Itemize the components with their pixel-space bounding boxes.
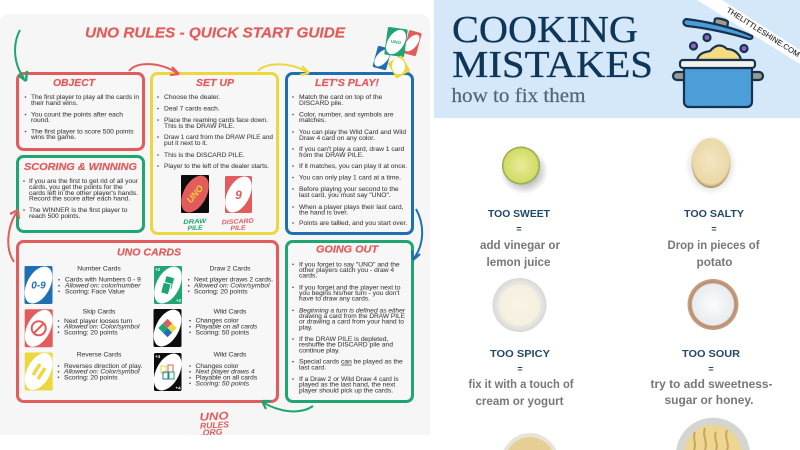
arrow: object to set up — [129, 64, 179, 75]
heading: scoring and winning: SCORING & WINNING — [24, 162, 137, 173]
panel: let's play — [286, 74, 412, 234]
text: wild cards: Playable on all cards — [196, 324, 258, 331]
text: too sour — [650, 348, 773, 407]
text: too sweet: add vinegar or — [480, 240, 561, 252]
text: reverse cards: Reverse Cards — [77, 352, 122, 359]
heading: uno cards: UNO CARDS — [117, 248, 181, 258]
icon: wild draw 4 card: +4 — [155, 354, 161, 359]
text: going out rules: Special cards can be played as the — [299, 359, 403, 366]
icon: discard pile card: 9 — [235, 188, 242, 202]
text: wild cards: Changes color — [196, 318, 239, 325]
text: going out rules: continue play. — [299, 348, 340, 355]
text: going out rules: other players catch you - draw 4 — [299, 267, 394, 274]
icon: bowl of cream — [492, 278, 546, 332]
text: going out rules: reshuffle the DISCARD pile and — [299, 342, 393, 349]
text: going out rules: last card. — [299, 364, 326, 371]
text: play steps: When a player plays their last card, — [299, 204, 404, 211]
text: wild draw 4 cards: Next player draws 4 — [196, 369, 255, 376]
panel: object — [18, 74, 144, 150]
text: scoring rules: The WINNER is the first player to — [29, 207, 128, 214]
panel: cooking header — [434, 0, 800, 118]
arrow: uno cards to scoring — [8, 210, 19, 262]
subtitle: how to fix them: how to fix them — [452, 86, 586, 107]
icon: potato — [685, 135, 737, 195]
title: UNO rules quick start guide: UNO RULES - QUICK START GUIDE — [85, 26, 346, 42]
text: set up steps: Player to the left of the dealer starts. — [164, 163, 269, 170]
arrow: green start arrow — [15, 30, 27, 81]
text: reverse cards: Reverses direction of play. — [64, 363, 142, 370]
label: draw pile — [183, 218, 208, 233]
text: skip cards: Skip Cards — [83, 308, 116, 315]
text: reverse cards — [58, 352, 142, 381]
text: wild cards: Scoring: 50 points — [196, 329, 250, 336]
icon: bottom right bowl of pasta — [676, 418, 750, 450]
icon: wild card — [148, 305, 187, 351]
text: play steps: You can only play 1 card at a time. — [299, 174, 401, 182]
text: too sweet — [480, 208, 561, 269]
text: too spicy — [468, 348, 574, 408]
ribbon: the little shine watermark: THELITTLESHINE.COM — [725, 6, 800, 59]
panel: UNO rules background — [0, 14, 430, 435]
label: discard pile: DISCARD — [222, 218, 254, 226]
text: set up steps: Deal 7 cards each. — [164, 106, 220, 112]
text: draw 2 cards — [188, 265, 273, 295]
text: too spicy: cream or yogurt — [476, 396, 564, 408]
text: reverse cards: Allowed on: Color/symbol — [63, 369, 140, 376]
text: object rules: their hand wins. — [31, 100, 78, 107]
text: too spicy: = — [517, 364, 523, 374]
text: too salty: TOO SALTY — [684, 208, 744, 220]
text: wild draw 4 cards: Changes color — [196, 363, 239, 370]
title: cooking mistakes — [452, 9, 653, 86]
text: going out rules: If the DRAW PILE is depleted, — [299, 336, 388, 343]
text: too sour: = — [708, 364, 714, 374]
text: draw 2 cards: Draw 2 Cards — [210, 265, 251, 272]
text: object rules: round. — [31, 117, 50, 124]
label: draw pile: PILE — [187, 225, 203, 232]
text: too salty: potato — [696, 257, 732, 269]
text: play steps: from the DRAW PILE. — [299, 152, 364, 159]
icon: wild draw 4 card: +4 — [176, 386, 181, 390]
text: scoring rules: If you are the first to get rid of all your — [29, 178, 139, 185]
text: wild draw 4 cards: Scoring: 50 points — [196, 380, 250, 387]
text: scoring rules: Record the score after each hand. — [29, 196, 130, 202]
panel: going out — [286, 242, 412, 402]
text: play steps: If it matches, you can play it at once. — [299, 163, 407, 170]
text: set up steps: Choose the dealer. — [164, 94, 220, 101]
text: going out rules: played as the last hand, the next — [299, 382, 395, 389]
text: going out rules: play. — [299, 325, 313, 332]
title: cooking mistakes: COOKING — [452, 9, 638, 51]
text: wild cards — [189, 308, 258, 336]
text: too sour: try to add sweetness- — [650, 379, 773, 391]
arrow: set up to let's play — [258, 64, 309, 75]
text: set up steps: This is the DISCARD PILE. — [164, 152, 245, 159]
text: play steps — [292, 94, 407, 227]
text: set up steps — [157, 94, 273, 170]
text: object rules: wins the game. — [30, 134, 76, 141]
text: too salty: Drop in pieces of — [668, 240, 760, 252]
logo: uno rules org: RULES — [200, 419, 230, 431]
text: going out rules: If a Draw 2 or Wild Draw 4 card is — [299, 376, 399, 383]
icon: discard pile card — [220, 172, 257, 217]
text: draw 2 cards: Allowed on: Color/symbol — [193, 283, 270, 290]
text: skip cards: Next player looses turn — [64, 318, 133, 325]
text: too sour: TOO SOUR — [682, 348, 740, 360]
icon: draw 2 card: +2 — [176, 298, 182, 303]
text: wild draw 4 cards: Playable on all cards — [196, 375, 258, 382]
icon: fan of UNO cards: UNO — [391, 39, 402, 45]
text: wild cards: Wild Cards — [214, 308, 247, 315]
text: going out rules: have to draw any cards. — [299, 296, 370, 303]
text: going out rules — [292, 261, 406, 394]
text: too sour: sugar or honey. — [664, 395, 754, 407]
text: going out rules: Beginning a turn is defined as either — [299, 307, 406, 314]
text: play steps: Match the card on top of the — [299, 94, 383, 101]
text: play steps: Color, number, and symbols are — [299, 112, 394, 118]
text: too sweet: lemon juice — [486, 257, 550, 269]
ribbon: the little shine watermark — [697, 0, 800, 64]
text: going out rules: or drawing a card from your hand to — [299, 319, 404, 326]
text: going out rules: If you forget and the player next to — [299, 284, 401, 291]
text: play steps: matches. — [299, 117, 326, 124]
text: number cards: Cards with Numbers 0 - 9 — [65, 277, 141, 284]
text: play steps: Points are tallied, and you start over. — [299, 220, 407, 227]
text: scoring rules: cards, you get the points for the — [29, 184, 123, 191]
arrow: going out to uno cards — [262, 401, 313, 411]
text: too sweet: = — [516, 224, 522, 234]
text: too sweet: TOO SWEET — [488, 208, 551, 220]
icon: reverse card — [19, 348, 58, 395]
label: discard pile — [222, 218, 255, 233]
title: cooking mistakes: MISTAKES — [452, 44, 653, 86]
text: play steps: DISCARD pile. — [299, 100, 343, 107]
text: going out rules: drawing a card from the DRAW PILE — [299, 313, 406, 320]
panel: scoring and winning — [18, 156, 144, 232]
icon: draw 2 card — [148, 262, 188, 308]
text: play steps: the hand is over. — [299, 210, 348, 216]
text: play steps: You can play the Wild Card and Wild — [299, 129, 406, 136]
text: going out rules: If you forget to say "UNO" and the — [299, 261, 400, 268]
panel: set up — [152, 74, 278, 234]
icon: number card: 0-9 — [31, 280, 46, 292]
logo: uno rules org: .ORG — [200, 427, 223, 438]
heading: going out: GOING OUT — [316, 245, 379, 256]
label: draw pile: DRAW — [183, 218, 207, 226]
icon: number card — [19, 262, 58, 308]
text: too spicy: TOO SPICY — [490, 348, 550, 360]
text: wild draw 4 cards: Wild Cards — [214, 352, 247, 359]
heading: object: OBJECT — [53, 78, 96, 89]
text: set up steps: Place the reaming cards face down. — [164, 117, 268, 124]
arrow: let's play to going out — [412, 209, 422, 260]
text: set up steps: put it next to it. — [164, 140, 208, 147]
text: set up steps: This is the DRAW PILE. — [164, 123, 235, 130]
icon: bowl of salt — [688, 279, 738, 330]
text: number cards: Number Cards — [77, 265, 121, 272]
text: going out rules: player should pick up the cards. — [299, 387, 393, 394]
text: object rules: You count the points after each — [31, 112, 123, 118]
text: object rules — [25, 94, 139, 141]
text: object rules: The first player to play all the cards in — [31, 94, 139, 101]
logo: uno rules org — [200, 412, 229, 435]
text: object rules: The first player to score 500 points — [31, 128, 134, 136]
icon: draw pile card: UNO — [185, 183, 205, 205]
text: reverse cards: Scoring: 20 points — [64, 374, 118, 381]
icon: wild draw 4 card — [148, 349, 187, 395]
text: too spicy: fix it with a touch of — [468, 379, 574, 391]
label: discard pile: PILE — [230, 225, 246, 232]
text: number cards: Scoring: Face Value — [65, 288, 125, 295]
heading: set up: SET UP — [196, 78, 234, 89]
text: skip cards — [58, 308, 140, 336]
text: too salty: = — [711, 224, 717, 234]
icon: draw 2 card: +2 — [155, 267, 161, 272]
icon: cooking pot — [673, 18, 763, 107]
text: scoring rules: cards left in the other player's hands. — [29, 190, 138, 197]
icon: bottom left bowl — [504, 433, 556, 450]
heading: let's play: LET'S PLAY! — [315, 78, 380, 89]
text: going out rules: you begins his/her turn - you don't — [299, 290, 400, 297]
text: skip cards: Scoring: 20 points — [64, 329, 118, 336]
text: play steps: Draw 4 card on any color. — [299, 135, 375, 142]
text: draw 2 cards: Next player draws 2 cards. — [194, 277, 273, 284]
text: scoring rules: reach 500 points. — [29, 213, 80, 220]
text: play steps: last card, you must say "UNO". — [299, 192, 391, 199]
logo: uno rules org: UNO — [199, 410, 229, 424]
text: number cards — [58, 265, 141, 295]
text: skip cards: Allowed on: Color/symbol — [63, 324, 140, 331]
icon: lime — [500, 146, 548, 194]
text: number cards: Allowed on: color/number — [64, 283, 141, 290]
text: play steps: If you can't play a card, draw 1 card — [299, 146, 405, 153]
icon: draw pile card — [175, 171, 215, 217]
icon: skip card — [19, 305, 58, 351]
text: too salty — [668, 208, 760, 269]
text: draw 2 cards: Scoring: 20 points — [194, 288, 248, 295]
text: set up steps: Draw 1 card from the DRAW PILE and — [164, 134, 273, 141]
text: going out rules: cards. — [299, 273, 317, 280]
panel: uno cards — [18, 242, 278, 402]
text: wild draw 4 cards — [189, 352, 258, 387]
icon: fan of UNO cards — [370, 25, 424, 79]
text: scoring rules — [23, 178, 139, 220]
text: play steps: Before playing your second to the — [299, 186, 399, 193]
